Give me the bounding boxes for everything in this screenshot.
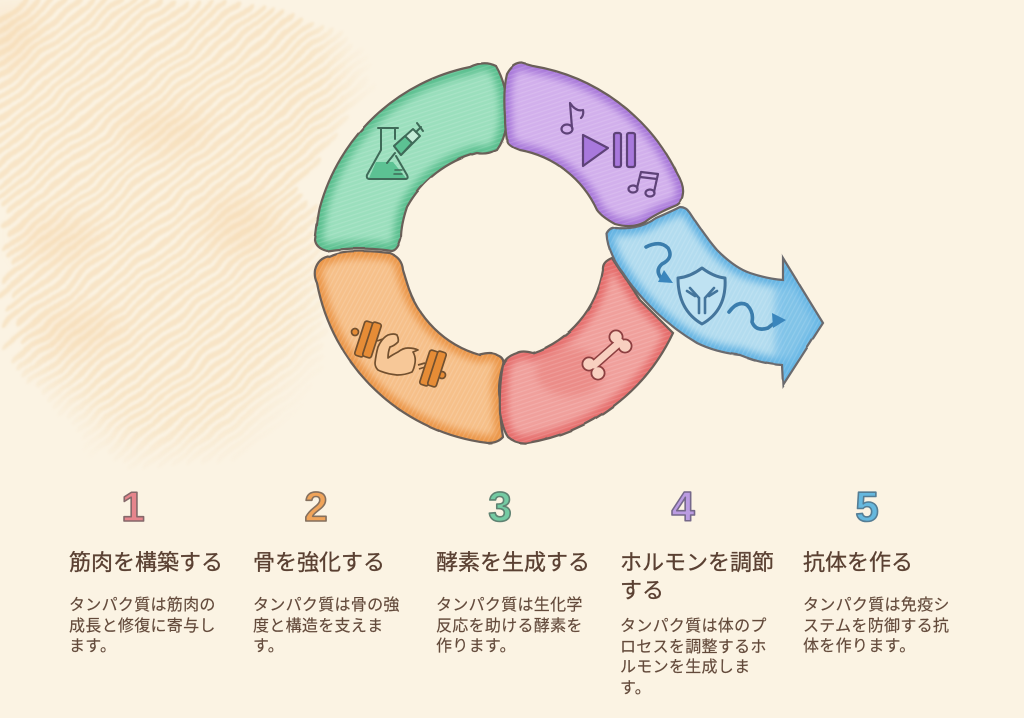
number 1: 1 <box>121 483 145 530</box>
description 2: タンパク質は骨の強 <box>253 597 400 614</box>
description 4: ロセスを調整するホ <box>620 639 767 656</box>
icon: music and play pause <box>562 103 658 196</box>
description 3: タンパク質は生化学 <box>436 597 583 614</box>
segment: blue antibody arrow <box>607 207 830 390</box>
heading 4: ホルモンを調節 <box>620 550 774 575</box>
icon: arm and dumbbell <box>352 320 447 388</box>
description 4: ルモンを生成しま <box>620 659 750 676</box>
segment: purple hormones <box>504 63 683 226</box>
description 2: 度と構造を支えま <box>253 618 383 635</box>
heading 4 <box>620 550 774 603</box>
description 4: す。 <box>620 680 651 697</box>
description 5: 体を作ります。 <box>803 638 916 655</box>
background pencil scribble <box>0 0 357 458</box>
text column 3: enzymes <box>436 550 590 655</box>
description 3: 反応を助ける酵素を <box>436 618 583 635</box>
description 3: 作ります。 <box>436 638 516 655</box>
icon: wavy arrow <box>729 304 786 329</box>
heading 5: 抗体を作る <box>803 550 913 575</box>
number 2: 2 <box>304 483 328 530</box>
heading 2: 骨を強化する <box>253 550 385 575</box>
description 5 <box>803 596 950 655</box>
description 4: タンパク質は体のプ <box>620 618 767 635</box>
number 4: 4 <box>671 483 695 530</box>
text column 4: hormones <box>620 550 774 697</box>
heading 3: 酵素を生成する <box>436 550 590 575</box>
description 2: す。 <box>253 638 284 655</box>
text column 5: antibodies <box>803 550 950 655</box>
number 5: 5 <box>855 483 879 530</box>
description 2 <box>253 596 400 655</box>
diagram: protein cycle <box>315 63 830 443</box>
icon: antibody shield <box>678 268 725 324</box>
icon: flask and syringe <box>367 123 423 179</box>
description 4 <box>620 617 767 697</box>
description 1 <box>69 596 216 655</box>
description 5: タンパク質は免疫シ <box>803 597 950 614</box>
icon: curved arrow <box>646 244 673 283</box>
description 5: ステムを防御する抗 <box>803 618 949 635</box>
description 1: ます。 <box>69 638 116 655</box>
text column 1: muscle <box>69 550 223 655</box>
icon: bone <box>582 330 632 380</box>
segment: green enzymes <box>315 63 507 251</box>
segment: red bone <box>500 258 673 443</box>
number 3: 3 <box>488 483 512 530</box>
segment: orange muscle <box>315 251 503 443</box>
heading 1: 筋肉を構築する <box>69 550 223 575</box>
heading 4: する <box>620 578 664 603</box>
description 1: 成長と修復に寄与し <box>69 618 216 635</box>
description 1: タンパク質は筋肉の <box>69 597 216 614</box>
description 3 <box>436 596 583 655</box>
text column 2: bone <box>253 550 400 655</box>
